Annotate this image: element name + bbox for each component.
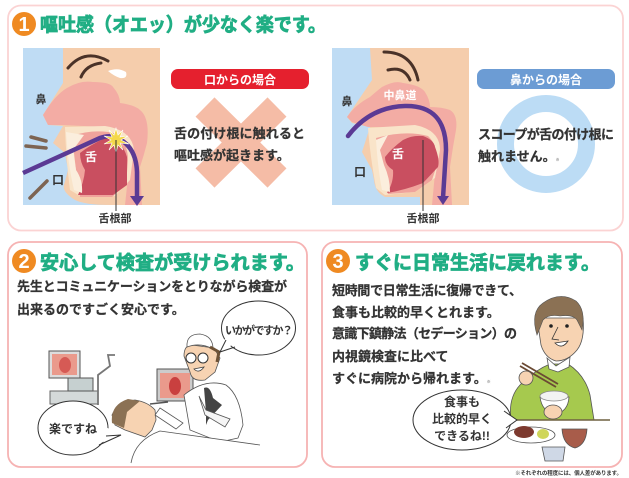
heading 1: 嘔吐感（オエッ）が少なく楽です。	[40, 13, 326, 36]
number badge 1: 1	[18, 14, 30, 36]
text: panel 3 body: 内視鏡検査に比べて	[332, 349, 448, 364]
footnote: ※それぞれの程度には、個人差があります。	[515, 469, 622, 477]
speech bubble: patient: 楽ですね	[49, 421, 97, 436]
illustration: scope through mouth	[23, 48, 160, 225]
text: panel 3 body: 短時間で日常生活に復帰できて、	[332, 283, 522, 298]
text: mouth route: 嘔吐感が起きます。	[174, 148, 290, 163]
panel: 2 reassurance	[8, 242, 307, 467]
speech bubble: man: 食事も	[444, 394, 480, 409]
text: mouth route: 舌の付け根に触れると	[174, 126, 305, 141]
number badge 2: 2	[18, 251, 30, 273]
illustration: scope through nose: 鼻	[342, 94, 352, 108]
text: panel 3 body: 意識下鎮静法（セデーション）の	[332, 326, 517, 341]
blue label: nose	[477, 69, 615, 89]
illustration: scope through nose	[332, 48, 469, 225]
text: nose route: スコープが舌の付け根に	[478, 127, 614, 142]
cross mark	[205, 107, 277, 178]
text: panel 2 body: 先生とコミュニケーションをとりながら検査が	[17, 279, 287, 294]
heading 3: すぐに日常生活に戻れます。	[355, 252, 600, 274]
text: nose route: ※	[556, 157, 560, 162]
text: panel 3 body: ※	[487, 379, 491, 384]
illustration: scope through mouth: 舌根部	[98, 211, 132, 225]
illustration: scope through nose: 舌	[392, 146, 404, 161]
illustration: scope through nose: 口	[354, 165, 366, 179]
illustration: scope through nose: 舌根部	[406, 211, 440, 225]
number badge 3	[326, 249, 350, 273]
illustration: scope through nose: 中鼻道	[384, 88, 416, 102]
illustration: man eating	[507, 296, 610, 461]
text: panel 3 body: すぐに病院から帰れます。	[332, 371, 487, 386]
panel: 1 less gagging	[8, 6, 623, 230]
text: panel 2 body: 出来るのですごく安心です。	[17, 302, 185, 317]
illustration: scope through mouth: 舌	[85, 149, 97, 164]
red label: mouth: 口からの場合	[204, 72, 276, 87]
illustration: patient	[112, 399, 260, 463]
speech bubble: man	[413, 390, 517, 450]
speech bubble: man: 比較的早く	[432, 411, 492, 426]
number badge 2	[12, 249, 36, 273]
speech bubble: doctor: いかがですか？	[225, 323, 293, 337]
number badge 1	[12, 12, 36, 36]
circle mark	[506, 104, 586, 184]
number badge 3: 3	[332, 251, 344, 273]
text: nose route: 触れません。	[478, 149, 556, 164]
illustration: scope through mouth: 口	[52, 173, 64, 187]
blue label: nose: 鼻からの場合	[510, 72, 582, 87]
speech bubble: patient	[38, 401, 121, 455]
panel: 3 quick recovery	[322, 242, 622, 467]
speech bubble: man: できるね!!	[434, 429, 490, 443]
illustration: doctor	[184, 334, 243, 442]
speech bubble: doctor	[220, 301, 296, 355]
heading 2: 安心して検査が受けられます。	[40, 251, 305, 274]
text: panel 3 body: 食事も比較的早くとれます。	[332, 305, 500, 320]
illustration: endoscope equipment	[49, 351, 193, 405]
red label: mouth	[171, 69, 309, 89]
illustration: scope through mouth: 鼻	[36, 92, 46, 106]
